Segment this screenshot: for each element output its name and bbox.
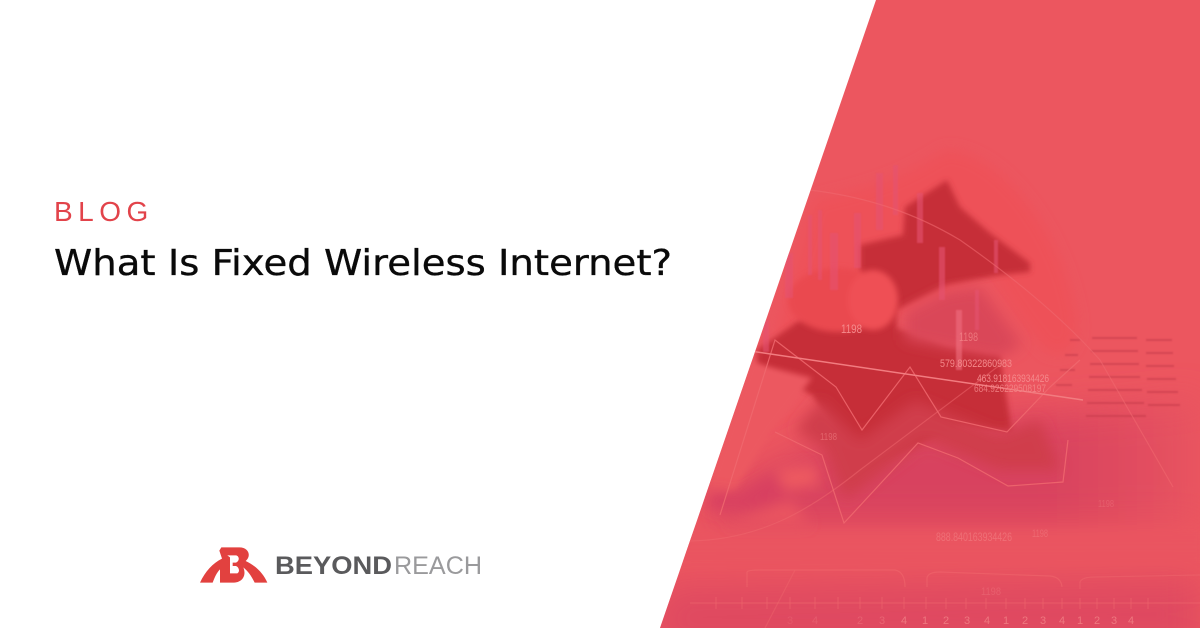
chart numbers: 1198 — [981, 586, 1001, 598]
chart numbers: 888.840163934426 — [936, 530, 1012, 544]
axis digits: 2 — [1022, 615, 1028, 627]
axis digits: 1 — [1003, 615, 1009, 627]
axis digits — [788, 616, 1134, 624]
chart lines — [690, 190, 1200, 628]
axis digits: 3 — [1111, 615, 1117, 627]
icon: logo mark — [200, 547, 267, 583]
hand — [775, 150, 1077, 354]
logo: Beyond Reach — [200, 547, 482, 583]
wordmark: BEYOND — [275, 552, 392, 580]
axis digits: 4 — [812, 615, 818, 627]
band of light across lower panel — [681, 528, 694, 566]
wordmark: reach: REACH — [394, 552, 482, 580]
axis digits: 1 — [922, 615, 928, 627]
eyebrow: BLOG: BLOG — [54, 196, 154, 227]
axis digits: 4 — [901, 615, 907, 627]
fingertip — [788, 268, 898, 332]
chart numbers: 463.918163934426 — [977, 373, 1049, 385]
title: What Is Fixed Wireless Internet? — [54, 243, 672, 284]
axis digits: 3 — [787, 615, 793, 627]
lower dark mid-tones — [795, 400, 1060, 500]
panel: red photo overlay — [650, 0, 1200, 628]
lower screen haze — [650, 400, 1200, 628]
keyboard under the hand — [905, 287, 1022, 358]
axis digits: 2 — [1094, 615, 1100, 627]
axis digits: 1 — [1077, 615, 1083, 627]
dark palm and lower shadow — [757, 180, 1030, 470]
chart numbers: 684.926229508197 — [974, 383, 1046, 395]
keyboard keys — [1056, 338, 1180, 416]
axis digits: 3 — [964, 615, 970, 627]
axis digits: 4 — [984, 615, 990, 627]
tablet: lighter pen shape — [703, 362, 812, 503]
axis digits: 4 — [1128, 615, 1134, 627]
chart numbers — [820, 322, 1114, 598]
axis digits: 3 — [879, 615, 885, 627]
chart numbers: 1198 — [841, 322, 862, 336]
chart numbers: 1198 — [820, 432, 837, 443]
axis digits: 2 — [857, 615, 863, 627]
chart numbers: 1198 — [959, 330, 978, 344]
axis digits: 2 — [943, 615, 949, 627]
axis digits: 3 — [1040, 615, 1046, 627]
chart numbers: 579.80322860983 — [940, 358, 1012, 370]
axis digits: 4 — [1059, 615, 1065, 627]
chart numbers: 1198 — [1032, 528, 1048, 540]
chart numbers: 1198 — [1098, 499, 1114, 510]
candlestick bars — [763, 165, 998, 370]
